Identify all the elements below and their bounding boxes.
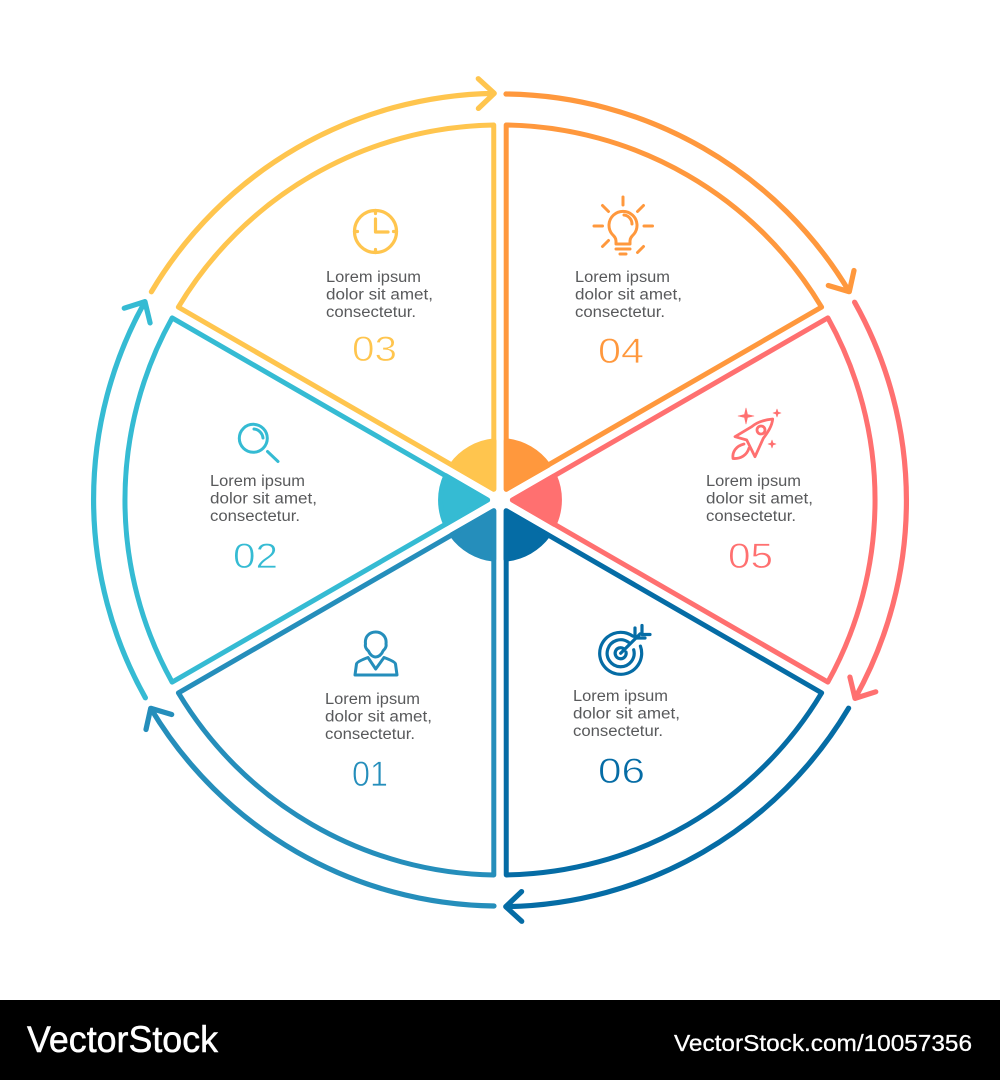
text block: segment 04: dolor sit amet, bbox=[575, 286, 682, 304]
arrow: yellow bbox=[151, 0, 497, 391]
text block: segment 02: consectetur. bbox=[210, 508, 300, 525]
number 03: 03 bbox=[352, 330, 397, 369]
number 04: 04 bbox=[598, 332, 644, 371]
panel: segment 04 orange bbox=[506, 125, 822, 489]
text block: segment 02 bbox=[210, 473, 317, 525]
text block: segment 03 bbox=[326, 269, 433, 321]
icon: person bbox=[355, 632, 397, 675]
text block: segment 01 bbox=[325, 691, 432, 743]
text block: segment 05: Lorem ipsum bbox=[706, 473, 801, 490]
number 02: 02 bbox=[233, 537, 278, 576]
text block: segment 03: consectetur. bbox=[326, 304, 416, 321]
icon: rocket bbox=[733, 408, 781, 459]
panel: segment 05 rose bbox=[512, 318, 986, 773]
footer bar bbox=[0, 1000, 1000, 1080]
icon: light bulb bbox=[594, 197, 652, 254]
footer logo: VectorStock bbox=[27, 1019, 218, 1060]
text block: segment 06: Lorem ipsum bbox=[573, 688, 668, 705]
text block: segment 02: dolor sit amet, bbox=[210, 490, 317, 508]
text block: segment 04: consectetur. bbox=[575, 304, 665, 321]
panel: segment 01 medium blue bbox=[178, 511, 494, 875]
text block: segment 05: dolor sit amet, bbox=[706, 490, 813, 508]
text block: segment 01: Lorem ipsum bbox=[325, 691, 420, 708]
text block: segment 01: dolor sit amet, bbox=[325, 708, 432, 726]
text block: segment 04 bbox=[575, 269, 682, 321]
text block: segment 01: consectetur. bbox=[325, 726, 415, 743]
icon: clock bbox=[354, 210, 396, 252]
number 06: 06 bbox=[598, 752, 645, 791]
icon: target bbox=[600, 626, 650, 674]
text block: segment 02: Lorem ipsum bbox=[210, 473, 305, 490]
arrow: rose bbox=[683, 302, 1000, 702]
arrow: orange bbox=[506, 94, 854, 292]
text block: segment 03: dolor sit amet, bbox=[326, 286, 433, 304]
text block: segment 06 bbox=[573, 688, 680, 740]
panel: segment 06 dark blue bbox=[348, 511, 822, 966]
text block: segment 05: consectetur. bbox=[706, 508, 796, 525]
arrow: cyan bbox=[0, 298, 317, 698]
text block: segment 04: Lorem ipsum bbox=[575, 269, 670, 286]
panel: segment 02 cyan bbox=[14, 227, 488, 682]
number 01: 01 bbox=[352, 755, 388, 794]
panel: segment 03 yellow bbox=[178, 34, 652, 489]
text block: segment 03: Lorem ipsum bbox=[326, 269, 421, 286]
number 05: 05 bbox=[728, 537, 773, 576]
arrow: dark blue bbox=[503, 609, 849, 1010]
text block: segment 06: dolor sit amet, bbox=[573, 706, 680, 722]
text block: segment 06: consectetur. bbox=[573, 723, 663, 740]
footer image reference: VectorStock.com/10057356 bbox=[674, 1030, 972, 1056]
text block: segment 05 bbox=[706, 473, 813, 525]
icon: magnifier bbox=[239, 424, 278, 462]
arrow: medium blue bbox=[146, 708, 494, 906]
